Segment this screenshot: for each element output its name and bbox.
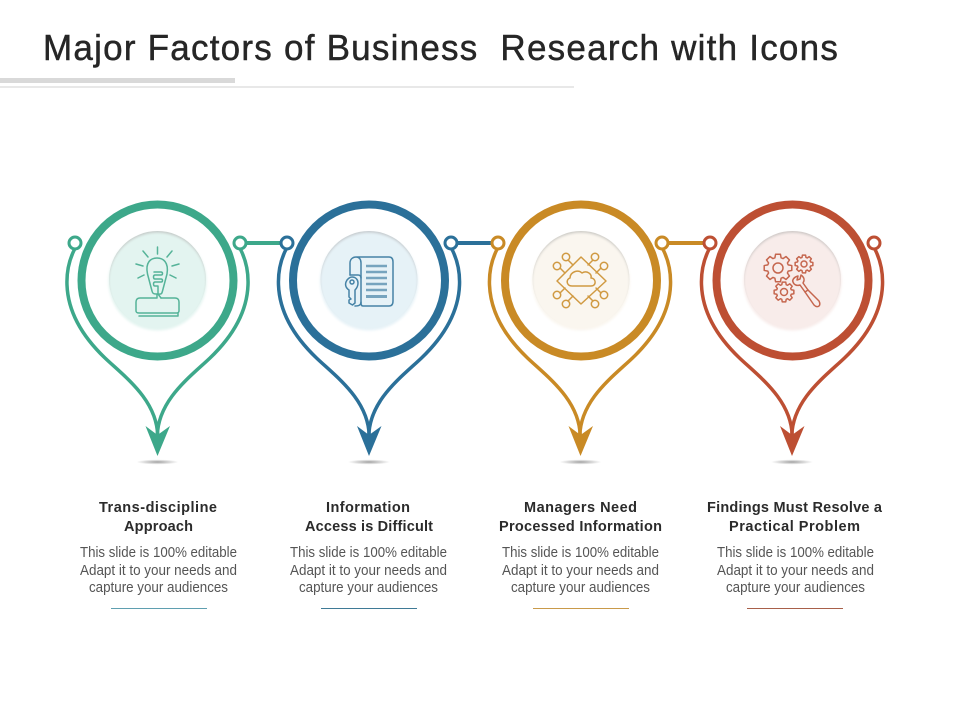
ring 4: [716, 204, 868, 356]
heading 1: [99, 500, 217, 535]
arrowhead 1: [146, 426, 170, 456]
heading 4: Findings Must Resolve a: [707, 500, 883, 516]
end dots 1: [69, 237, 246, 249]
pin 2: blue: [278, 204, 460, 464]
body 1: [80, 544, 237, 596]
heading 1: Trans-discipline: [99, 500, 217, 516]
heading 3: Processed Information: [499, 519, 662, 535]
underline 4: [747, 608, 843, 609]
end dots 2: [281, 237, 457, 249]
end dots 4: [704, 237, 880, 249]
body 4: capture your audiences: [726, 579, 865, 596]
arrowhead 3: [568, 426, 593, 456]
body 2: [290, 544, 447, 596]
arrowhead 2: [357, 426, 382, 456]
body 2: Adapt it to your needs and: [290, 562, 447, 579]
curved arrow lines 4: [701, 249, 883, 436]
heading 3: [499, 500, 662, 535]
pin 1: green: [67, 204, 248, 464]
body 4: [717, 544, 874, 596]
curved arrow lines 3: [489, 249, 671, 436]
connector: orange to red: [662, 241, 710, 245]
text block 3: [499, 500, 662, 609]
heading 2: Information: [326, 500, 410, 516]
body 2: capture your audiences: [299, 579, 438, 596]
heading 2: Access is Difficult: [305, 519, 433, 535]
underline 3: [533, 608, 629, 609]
title: Major Factors of Business Research with Icons: [43, 27, 838, 68]
icon: light bulb stamp: [136, 247, 179, 316]
ground shadow 2: [348, 460, 390, 464]
heading 2: [305, 500, 433, 535]
icon: document with key: [346, 257, 393, 306]
body 4: Adapt it to your needs and: [717, 562, 874, 579]
body 1: capture your audiences: [89, 579, 228, 596]
text block 1: [80, 500, 237, 609]
ground shadow 1: [136, 460, 178, 464]
ring 2: [293, 204, 445, 356]
heading 3: Managers Need: [524, 500, 637, 516]
ground shadow 4: [771, 460, 813, 464]
text block 2: [290, 500, 447, 609]
heading 4: Practical Problem: [729, 519, 860, 535]
pin 3: orange: [489, 204, 671, 464]
icon: gears and wrench: [764, 254, 820, 307]
ground shadow 3: [560, 460, 602, 464]
disc 4: [744, 231, 842, 330]
text block 4: [707, 500, 883, 609]
body 2: This slide is 100% editable: [290, 544, 447, 561]
body 3: This slide is 100% editable: [502, 544, 659, 561]
body 1: Adapt it to your needs and: [80, 562, 237, 579]
disc 3: [532, 231, 630, 330]
heading 4: [707, 500, 883, 535]
ring 3: [505, 204, 657, 356]
underline 1: [111, 608, 207, 609]
curved arrow lines 2: [278, 249, 460, 436]
title underline bar: [0, 78, 574, 88]
disc 1: [108, 231, 206, 330]
curved arrow lines 1: [67, 249, 248, 436]
connector: blue to orange: [451, 241, 498, 245]
arrowhead 4: [780, 426, 804, 456]
body 4: This slide is 100% editable: [717, 544, 874, 561]
pin 4: red: [701, 204, 883, 464]
body 3: Adapt it to your needs and: [502, 562, 659, 579]
body 3: capture your audiences: [511, 579, 650, 596]
underline 2: [321, 608, 417, 609]
ring 1: [82, 204, 234, 356]
disc 2: [320, 231, 418, 330]
body 3: [502, 544, 659, 596]
icon: cloud chip: [553, 253, 608, 308]
connector: green to blue: [240, 241, 287, 245]
heading 1: Approach: [124, 519, 193, 535]
end dots 3: [492, 237, 668, 249]
body 1: This slide is 100% editable: [80, 544, 237, 561]
